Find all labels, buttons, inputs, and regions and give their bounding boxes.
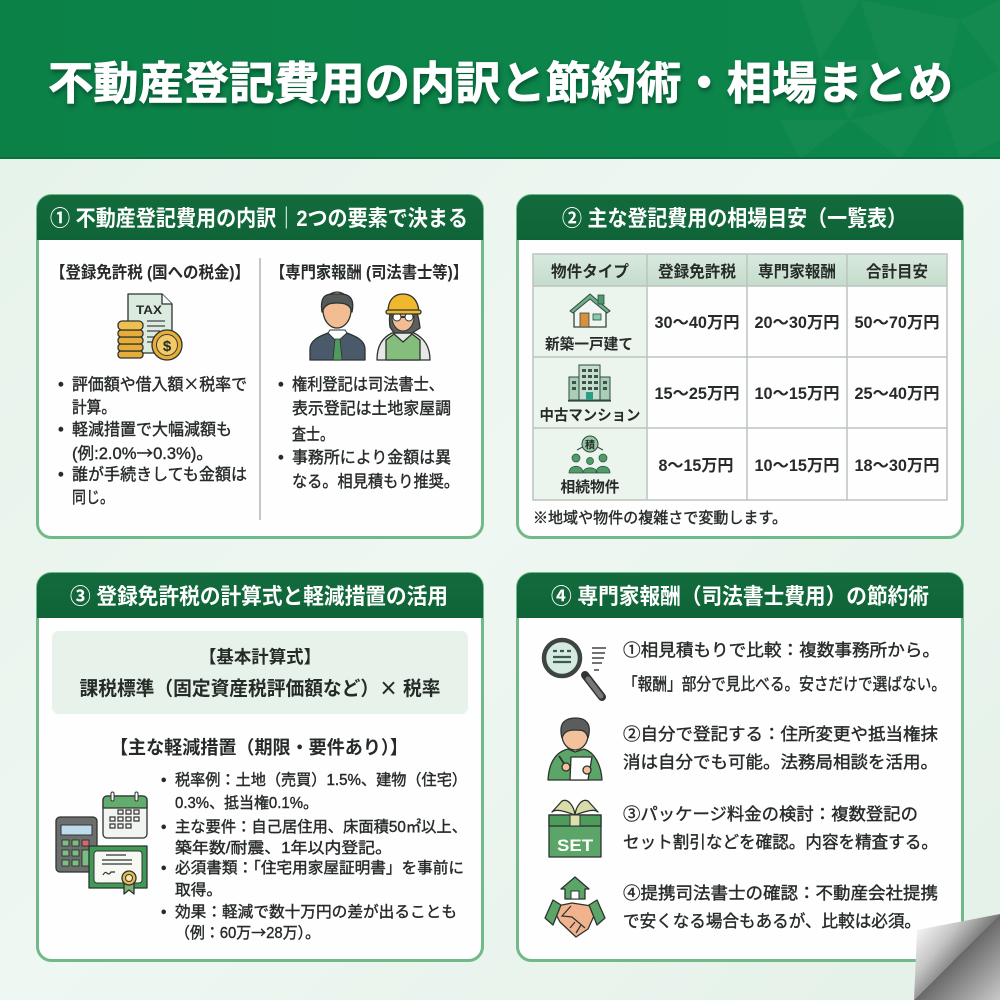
- tip 3: セット割引などを確認。内容を精査する。: [623, 833, 938, 852]
- left bullet list: (例:2.0%→0.3%)。: [72, 440, 213, 464]
- cost table: 専門家報酬: [758, 262, 836, 281]
- cost table: 8～15万円: [658, 457, 734, 475]
- cost table: 中古マンション: [540, 407, 640, 424]
- icon: person filling form: [548, 718, 602, 780]
- panel 3 heading: ③ 登録免許税の計算式と軽減措置の活用: [70, 584, 448, 609]
- tip 1: ①相見積もりで比較：複数事務所から。: [623, 641, 940, 660]
- right bullet list: •: [278, 449, 284, 467]
- panel 4: ways to save on professional fees: [517, 573, 963, 960]
- icon: tax document and coins: $: [163, 338, 172, 355]
- tip 4: ④提携司法書士の確認：不動産会社提携: [623, 884, 938, 903]
- cost table: 相続物件: [560, 478, 620, 496]
- icon: set gift box: [549, 800, 601, 857]
- tip 1: [623, 641, 946, 694]
- left bullet list: 計算。: [72, 398, 116, 417]
- left bullet list: [58, 371, 247, 507]
- panel 1: breakdown of registration costs: [37, 195, 483, 538]
- column heading: professional fee: 【専門家報酬 (司法書士等)】: [270, 262, 468, 282]
- icon: handshake and house: [545, 877, 605, 937]
- column heading: registration tax: 【登録免許税 (国への税金)】: [50, 262, 250, 282]
- cost table: 新築一戸建て: [545, 335, 633, 353]
- cost table: 50～70万円: [854, 314, 940, 332]
- panel 1 heading: ① 不動産登記費用の内訳｜2つの要素で決まる: [50, 206, 468, 231]
- icon: inherited property: 積: [585, 438, 595, 452]
- reductions bullet list: •: [161, 860, 166, 877]
- icon: set gift box: SET: [557, 836, 594, 855]
- left bullet list: •: [58, 421, 64, 439]
- cost table: 物件タイプ: [551, 263, 629, 281]
- left bullet list: 誰が手続きしても金額は: [72, 465, 247, 484]
- cost table: [533, 254, 947, 500]
- cost table: 登録免許税: [658, 262, 736, 281]
- reductions bullet list: 0.3%、抵当権0.1%。: [175, 794, 318, 812]
- icon: tax document and coins: [118, 294, 182, 360]
- panel 3: tax formula and reductions: [37, 573, 483, 960]
- cost table: 10～15万円: [754, 457, 840, 475]
- cost table: 10～15万円: [754, 385, 840, 403]
- formula box: 課税標準（固定資産税評価額など）× 税率: [80, 672, 440, 701]
- reductions bullet list: 主な要件：自己居住用、床面積50㎡以上、: [175, 818, 467, 836]
- left bullet list: 評価額や借入額×税率で: [72, 371, 247, 395]
- cost table: 15～25万円: [654, 385, 740, 403]
- panel 2 heading: ② 主な登記費用の相場目安（一覧表）: [562, 206, 907, 231]
- right bullet list: •: [278, 376, 284, 394]
- icon: judicial scrivener and surveyor: [310, 292, 430, 360]
- cost table: 18～30万円: [854, 457, 940, 475]
- right bullet list: 権利登記は司法書士、: [292, 375, 444, 394]
- panel 2: cost table: [517, 195, 963, 538]
- icon: inherited property: [569, 436, 610, 473]
- icon: calculator, calendar and certificate: [56, 792, 147, 894]
- tip 3: [623, 805, 938, 852]
- header banner: [0, 0, 1000, 159]
- right bullet list: なる。相見積もり推奨。: [292, 472, 459, 491]
- tip 4: [623, 884, 938, 931]
- icon: apartment building: [568, 365, 611, 402]
- icon: new house: [570, 294, 610, 327]
- right bullet list: 表示登記は土地家屋調: [292, 399, 451, 418]
- tip 1: 「報酬」部分で見比べる。安さだけで選ばない。: [623, 675, 946, 694]
- reductions bullet list: 必須書類：「住宅用家屋証明書」を事前に: [175, 859, 464, 877]
- right bullet list: [278, 375, 459, 491]
- table footnote: ※地域や物件の複雑さで変動します。: [533, 509, 787, 527]
- reductions bullet list: 効果：軽減で数十万円の差が出ることも: [175, 903, 457, 921]
- formula box: 【基本計算式】: [199, 647, 321, 667]
- reductions bullet list: （例：60万→28万）。: [175, 921, 320, 943]
- left bullet list: •: [58, 466, 64, 484]
- icon: magnifier: [544, 640, 606, 697]
- cost table: 20～30万円: [754, 314, 840, 332]
- tip 2: ②自分で登記する：住所変更や抵当権抹: [623, 725, 938, 744]
- reductions bullet list: 取得。: [175, 881, 222, 899]
- icon: tax document and coins: TAX: [136, 303, 162, 317]
- tip 4: で安くなる場合もあるが、比較は必須。: [623, 912, 921, 931]
- page curl corner: [914, 914, 1000, 1000]
- left bullet list: 軽減措置で大幅減額も: [72, 420, 232, 439]
- panel 4 heading: ④ 専門家報酬（司法書士費用）の節約術: [551, 584, 929, 609]
- left bullet list: •: [58, 376, 64, 394]
- tip 3: ③パッケージ料金の検討：複数登記の: [623, 805, 918, 824]
- formula box: [52, 631, 468, 714]
- tip 2: [623, 725, 938, 772]
- reductions heading: 【主な軽減措置（期限・要件あり）】: [110, 737, 408, 758]
- right bullet list: 事務所により金額は異: [292, 448, 451, 467]
- reductions bullet list: 税率例：土地（売買）1.5%、建物（住宅）: [175, 771, 467, 789]
- title: 不動産登記費用の内訳と節約術・相場まとめ: [48, 58, 953, 109]
- left bullet list: 同じ。: [72, 489, 114, 507]
- reductions bullet list: 築年数/耐震、1年以内登記。: [175, 839, 392, 857]
- reductions bullet list: •: [161, 772, 166, 789]
- cost table: 合計目安: [866, 262, 928, 281]
- reductions bullet list: •: [161, 904, 166, 921]
- cost table: 30～40万円: [654, 314, 740, 332]
- reductions bullet list: •: [161, 819, 166, 836]
- reductions bullet list: [161, 771, 467, 943]
- right bullet list: 査士。: [292, 425, 334, 444]
- tip 2: 消は自分でも可能。法務局相談を活用。: [623, 753, 938, 772]
- cost table: 25～40万円: [854, 385, 940, 403]
